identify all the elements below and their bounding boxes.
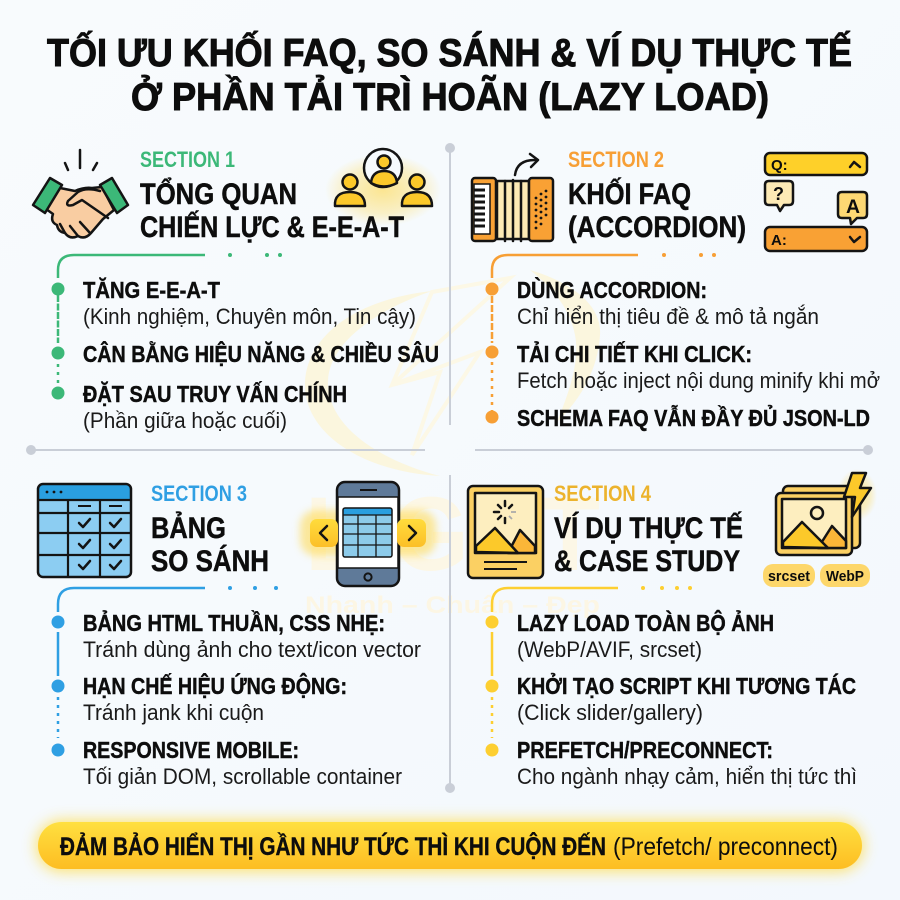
icon: FAQ question and answer xyxy=(765,153,867,251)
section 3 list xyxy=(83,608,421,789)
icon: stacked images with bolt and format tags: srcset xyxy=(768,568,810,585)
section 2 heading: (ACCORDION) xyxy=(568,211,746,244)
section 2 timeline xyxy=(486,253,716,424)
section 3 list: RESPONSIVE MOBILE: xyxy=(83,737,299,763)
section 1 list: (Phần giữa hoặc cuối) xyxy=(83,408,287,433)
section 3 list: Tối giản DOM, scrollable container xyxy=(83,764,402,789)
icon: stacked images with bolt and format tags: WebP xyxy=(826,568,864,585)
icon: FAQ question and answer: Q: xyxy=(771,157,788,174)
section 1 list: ĐẶT SAU TRUY VẤN CHÍNH xyxy=(83,380,347,407)
section 2 list: DÙNG ACCORDION: xyxy=(517,276,707,303)
section 2 label: SECTION 2 xyxy=(568,147,664,172)
section 2 list: Fetch hoặc inject nội dung minify khi mở xyxy=(517,368,880,393)
section 1 list: TĂNG E-E-A-T xyxy=(83,276,220,303)
panel: section 4 xyxy=(468,469,877,789)
section 2 heading xyxy=(568,177,746,244)
section 3 heading: BẢNG xyxy=(151,511,226,545)
icon: team people xyxy=(325,149,441,226)
icon: stacked images with bolt and format tags xyxy=(763,469,877,587)
panel: section 1 xyxy=(33,147,441,433)
section 1 heading: CHIẾN LỰC & E-E-A-T xyxy=(140,210,404,244)
icon: FAQ question and answer: A xyxy=(846,197,860,218)
section 3 list: HẠN CHẾ HIỆU ỨNG ĐỘNG: xyxy=(83,672,347,699)
section 1 heading: TỔNG QUAN xyxy=(140,177,297,211)
section 4 heading xyxy=(554,511,743,578)
section 4 heading: & CASE STUDY xyxy=(554,545,740,578)
section 1 heading xyxy=(140,177,404,244)
panel: section 3 xyxy=(38,481,436,789)
callout banner: (Prefetch/ preconnect) xyxy=(613,833,838,861)
section 4 label: SECTION 4 xyxy=(554,481,652,506)
section 4 timeline xyxy=(486,586,692,756)
section 4 list: (Click slider/gallery) xyxy=(517,700,703,725)
icon: FAQ question and answer: A: xyxy=(771,232,787,249)
section 1 label: SECTION 1 xyxy=(140,147,235,172)
section 3 heading xyxy=(151,511,269,578)
icon: handshake xyxy=(33,150,128,237)
grid dividers xyxy=(26,143,873,793)
section 3 timeline xyxy=(52,586,278,756)
section 2 list xyxy=(517,276,880,431)
callout banner xyxy=(36,820,864,872)
icon: mobile scrollable table xyxy=(300,482,436,586)
section 2 list: Chỉ hiển thị tiêu đề & mô tả ngắn xyxy=(517,304,819,329)
section 2 heading: KHỐI FAQ xyxy=(568,177,691,211)
title: TỐI ƯU KHỐI FAQ, SO SÁNH & VÍ DỤ THỰC TẾ xyxy=(47,30,852,75)
section 1 list xyxy=(83,276,439,433)
icon: comparison table xyxy=(38,484,131,577)
section 1 timeline xyxy=(52,253,282,400)
watermark: light logo: Nhanh – Chuẩn – Đẹp xyxy=(305,592,600,619)
title: Ở PHẦN TẢI TRÌ HOÃN (LAZY LOAD) xyxy=(131,75,769,119)
watermark: light logo: LIGHT xyxy=(305,476,600,593)
icon: accordion xyxy=(472,154,553,241)
icon: FAQ question and answer: ? xyxy=(773,184,784,204)
section 3 list: Tránh dùng ảnh cho text/icon vector xyxy=(83,637,421,662)
callout banner: ĐẢM BẢO HIỂN THỊ GẦN NHƯ TỨC THÌ KHI CUỘN ĐẾN xyxy=(60,831,606,861)
panel: section 2 xyxy=(472,147,880,431)
section 4 list: PREFETCH/PRECONNECT: xyxy=(517,737,773,763)
section 3 list: BẢNG HTML THUẦN, CSS NHẸ: xyxy=(83,608,385,636)
section 1 list: (Kinh nghiệm, Chuyên môn, Tin cậy) xyxy=(83,304,416,329)
section 3 list: Tránh jank khi cuộn xyxy=(83,700,264,725)
section 4 list: LAZY LOAD TOÀN BỘ ẢNH xyxy=(517,608,774,636)
section 4 list: (WebP/AVIF, srcset) xyxy=(517,637,702,662)
section 4 heading: VÍ DỤ THỰC TẾ xyxy=(554,511,743,545)
section 3 label: SECTION 3 xyxy=(151,481,247,506)
section 2 list: TẢI CHI TIẾT KHI CLICK: xyxy=(517,339,752,367)
section 1 list: CÂN BẰNG HIỆU NĂNG & CHIỀU SÂU xyxy=(83,340,439,367)
icon: lazy image card xyxy=(468,486,543,578)
watermark: light logo xyxy=(305,270,600,619)
section 3 heading: SO SÁNH xyxy=(151,544,269,578)
section 4 list xyxy=(517,608,857,789)
section 4 list: Cho ngành nhạy cảm, hiển thị tức thì xyxy=(517,764,857,789)
title xyxy=(47,30,852,119)
